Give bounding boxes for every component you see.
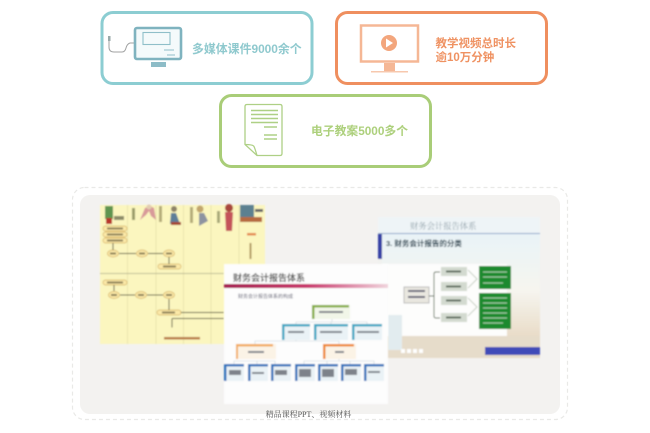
- card: teaching video duration: [336, 12, 546, 84]
- screenshot: yellow swimlane flowchart: [100, 204, 265, 344]
- icon: monitor with play button: [361, 26, 418, 72]
- swimlane nodes: [103, 226, 181, 315]
- label: teaching video duration: 教学视频总时长: [436, 36, 516, 50]
- label: multimedia courseware count: 多媒体课件9000余个: [192, 42, 302, 56]
- screenshot: report classification slide: 3. 财务会计报告的分类: [386, 238, 462, 248]
- slide org chart: [224, 305, 384, 381]
- card: multimedia courseware: [102, 12, 312, 84]
- label: teaching video duration: 逾10万分钟: [436, 50, 494, 64]
- screenshot: report system structure slide: 财务会计报告体系的构成: [238, 293, 293, 300]
- caption: 精品课程PPT、视频材料: [266, 409, 351, 419]
- screenshot: report classification slide: [378, 217, 540, 358]
- icon: document: [245, 104, 282, 156]
- panel: course material gallery: [72, 188, 568, 420]
- screenshot: report classification slide: 财务会计报告体系: [410, 221, 476, 231]
- icon: computer with cable: [108, 28, 181, 67]
- card: electronic lesson plans: [220, 96, 430, 166]
- lane figures: [105, 204, 263, 259]
- slide diagram: [404, 287, 429, 303]
- screenshot: report system structure slide: [224, 264, 388, 404]
- label: lesson plan count: 电子教案5000多个: [311, 124, 408, 138]
- screenshot: report system structure slide: 财务会计报告体系: [233, 272, 305, 283]
